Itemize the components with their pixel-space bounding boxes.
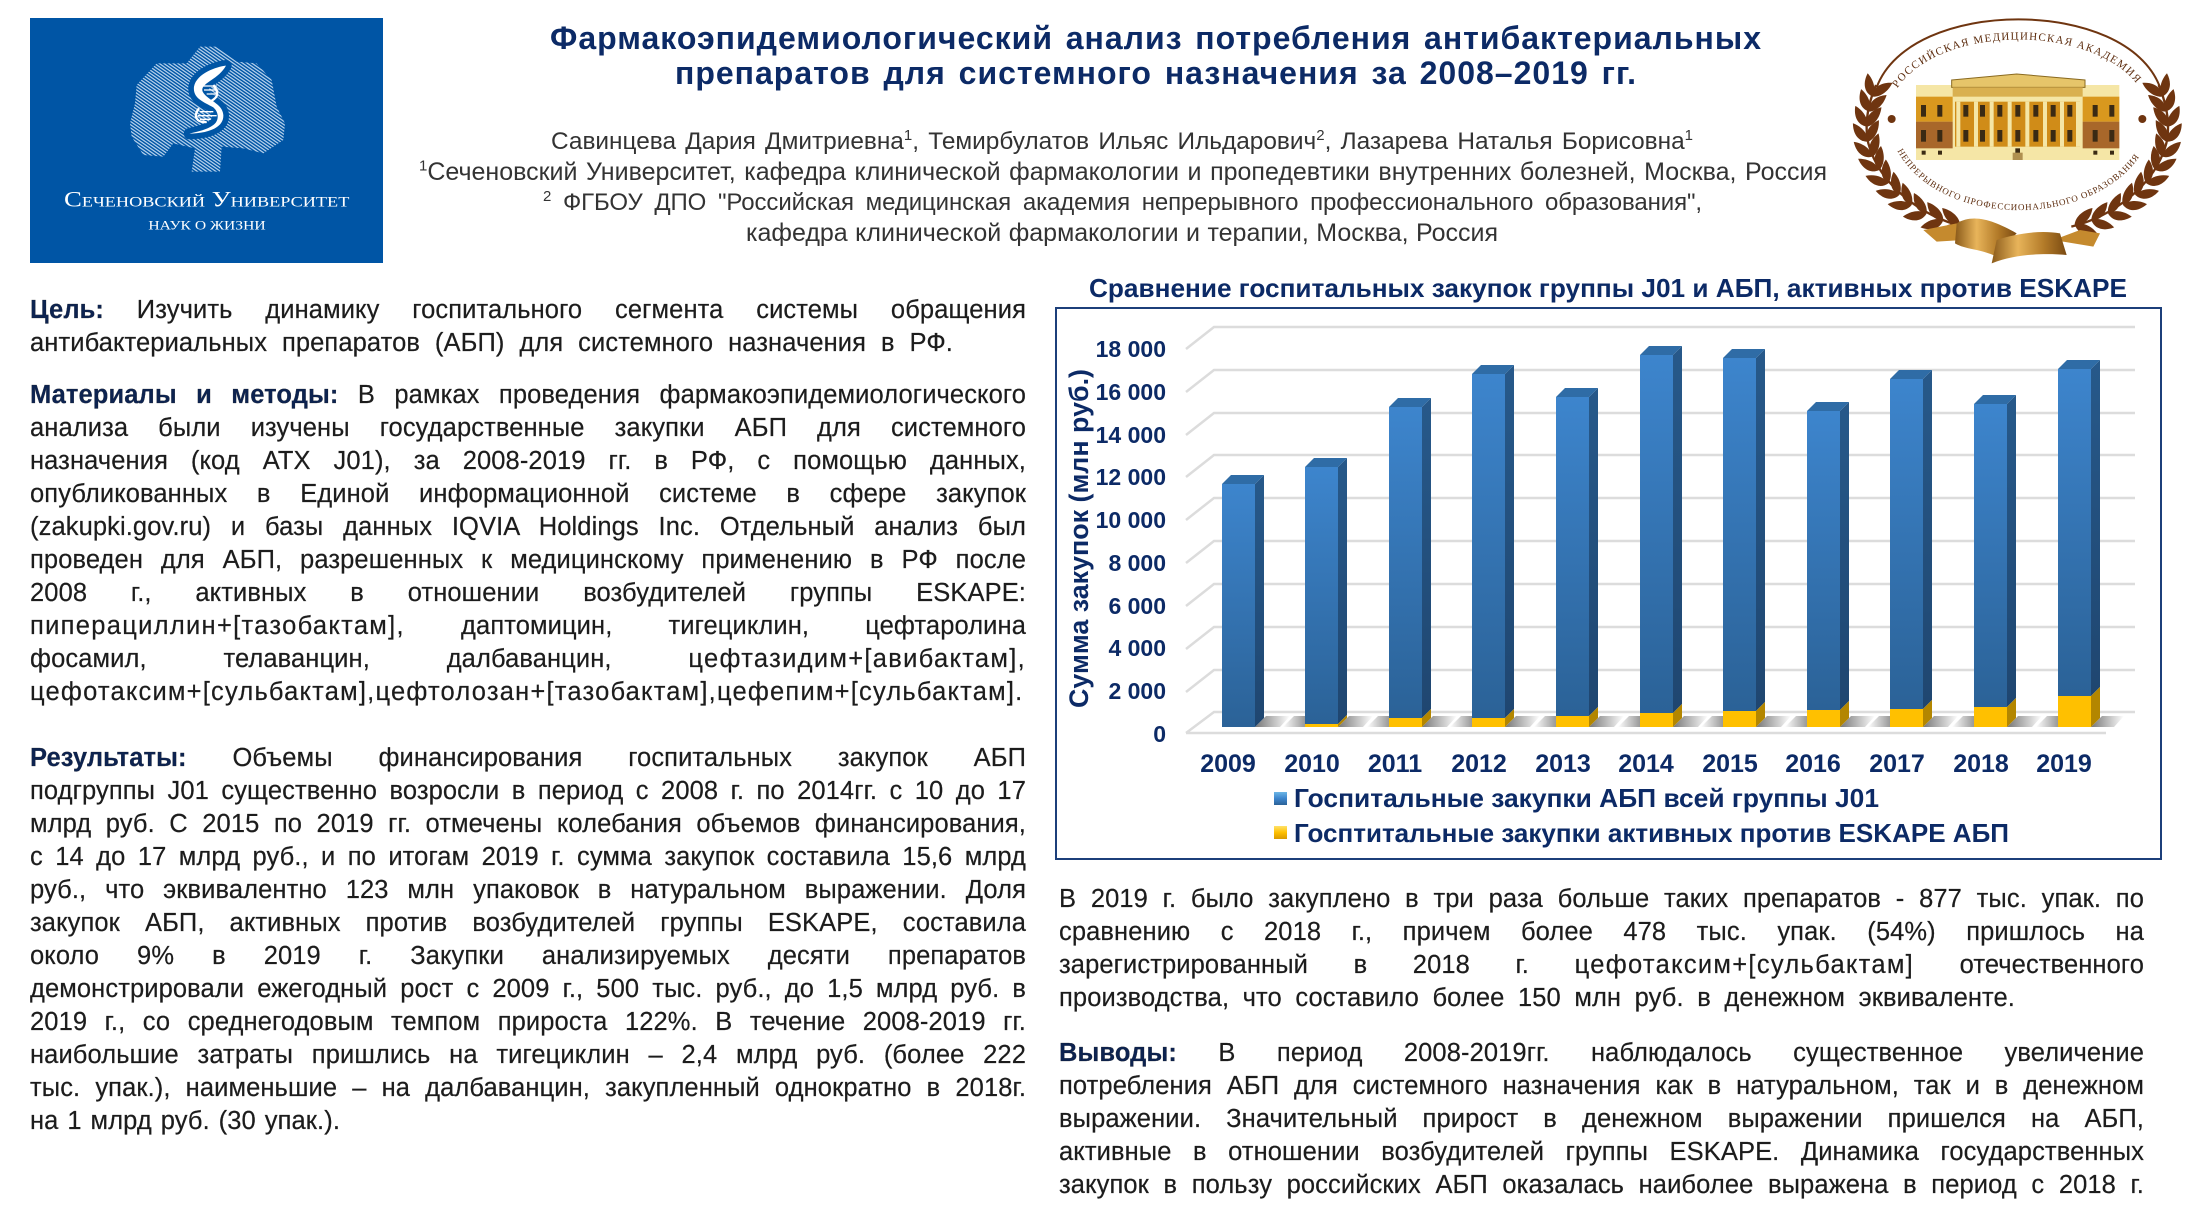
text block: 2019 purchases: производства, что составило более 150 млн руб. в денежном эквиваленте. bbox=[1059, 984, 2015, 1012]
x axis labels: 2013 bbox=[1535, 750, 1591, 778]
floor shadows bbox=[1255, 716, 2124, 727]
bar chart bbox=[1055, 307, 2162, 860]
panel: results: демонстрировали ежегодный рост с 2009 г., 500 тыс. руб., до 1,5 млрд руб. в bbox=[30, 975, 1026, 1003]
panel: materials and methods: пиперациллин+[тазобактам], даптомицин, тигециклин, цефтаролина bbox=[30, 612, 1026, 640]
x axis labels bbox=[1200, 750, 2092, 778]
x axis labels: 2017 bbox=[1869, 750, 1925, 778]
panel: results: Результаты: Объемы финансирования госпитальных закупок АБП bbox=[30, 744, 1026, 772]
y axis labels: 0 bbox=[1153, 721, 1166, 747]
panel: conclusions: активные в отношении возбудителей группы ESKAPE. Динамика государственных bbox=[1059, 1138, 2144, 1166]
x axis labels: 2018 bbox=[1953, 750, 2009, 778]
panel: results: млрд руб. С 2015 по 2019 гг. отмечены колебания объемов финансирования, bbox=[30, 810, 1026, 838]
y axis labels bbox=[1096, 336, 1166, 747]
panel: materials and methods: Материалы и методы: В рамках проведения фармакоэпидемиологического bbox=[30, 381, 1026, 409]
panel: materials and methods: цефотаксим+[сульбактам],цефтолозан+[тазобактам],цефепим+[сульбактам]. bbox=[30, 678, 1023, 706]
panel: materials and methods: анализа были изучены государственные закупки АБП для системного bbox=[30, 414, 1026, 442]
chart heading: Сравнение госпитальных закупок группы J01 и АБП, активных против ESKAPE bbox=[1089, 273, 2127, 303]
panel: results: около 9% в 2019 г. Закупки анализируемых десяти препаратов bbox=[30, 942, 1026, 970]
logo: Russian Medical Academy: НЕПРЕРЫВНОГО ПРОФЕССИОНАЛЬНОГО ОБРАЗОВАНИЯ bbox=[1897, 148, 2139, 210]
logo: Russian Medical Academy: РОССИЙСКАЯ МЕДИЦИНСКАЯ АКАДЕМИЯ bbox=[1892, 32, 2142, 88]
title: Фармакоэпидемиологический анализ потребления антибактериальных bbox=[550, 20, 1762, 56]
logo: Sechenov University bbox=[30, 18, 383, 263]
panel: goal bbox=[30, 296, 1026, 357]
panel: conclusions: Выводы: В период 2008-2019гг. наблюдалось существенное увеличение bbox=[1059, 1039, 2144, 1067]
panel: results: с 14 до 17 млрд руб., и по итогам 2019 г. сумма закупок составила 15,6 млрд bbox=[30, 843, 1026, 871]
grid lines bbox=[1186, 327, 2135, 733]
panel: results: наибольшие затраты пришлись на тигециклин – 2,4 млрд руб. (более 222 bbox=[30, 1041, 1026, 1069]
y axis title: Сумма закупок (млн руб.) bbox=[1064, 369, 1094, 708]
ribbon bbox=[1923, 219, 2100, 263]
panel: results: руб., что эквивалентно 123 млн упаковок в натуральном выражении. Доля bbox=[30, 876, 1026, 904]
x axis labels: 2010 bbox=[1284, 750, 1340, 778]
logo: Sechenov University: НАУК О ЖИЗНИ bbox=[148, 218, 266, 232]
text block: 2019 purchases: сравнению с 2018 г., причем более 478 тыс. упак. (54%) пришлось на bbox=[1059, 918, 2144, 946]
title bbox=[550, 20, 1762, 91]
y axis labels: 12 000 bbox=[1096, 464, 1166, 490]
panel: results bbox=[30, 744, 1026, 1135]
panel: results: 2019 г., со среднегодовым темпом прироста 122%. В течение 2008-2019 гг. bbox=[30, 1008, 1026, 1036]
x axis labels: 2016 bbox=[1785, 750, 1841, 778]
panel: materials and methods bbox=[30, 381, 1026, 706]
authors and affiliations: кафедра клинической фармакологии и терапии, Москва, Россия bbox=[746, 219, 1498, 247]
y axis labels: 8 000 bbox=[1108, 550, 1166, 576]
panel: materials and methods: назначения (код АТХ J01), за 2008-2019 гг. в РФ, с помощью данных, bbox=[30, 447, 1026, 475]
panel: results: подгруппы J01 существенно возросли в период с 2008 г. по 2014гг. с 10 до 17 bbox=[30, 777, 1026, 805]
y axis labels: 4 000 bbox=[1108, 635, 1166, 661]
panel: conclusions: закупок в пользу российских АБП оказалась наиболее выражена в период с 2018 г. bbox=[1059, 1171, 2144, 1199]
y axis labels: 10 000 bbox=[1096, 507, 1166, 533]
legend: Госптитальные закупки активных против ESKAPE АБП bbox=[1294, 818, 2009, 848]
x axis labels: 2012 bbox=[1451, 750, 1507, 778]
authors and affiliations bbox=[419, 127, 1827, 247]
panel: results: тыс. упак.), наименьшие – на далбаванцин, закупленный однократно в 2018г. bbox=[30, 1074, 1026, 1102]
y axis labels: 2 000 bbox=[1108, 678, 1166, 704]
panel: materials and methods: проведен для АБП, разрешенных к медицинскому применению в РФ после bbox=[30, 546, 1026, 574]
panel: materials and methods: опубликованных в Единой информационной системе в сфере закупок bbox=[30, 480, 1026, 508]
panel: conclusions bbox=[1059, 1039, 2144, 1199]
authors and affiliations: Савинцева Дария Дмитриевна1, Темирбулатов Ильяс Ильдарович2, Лазарева Наталья Борисовна1 bbox=[551, 127, 1693, 155]
panel: materials and methods: 2008 г., активных в отношении возбудителей группы ESKAPE: bbox=[30, 579, 1026, 607]
y axis labels: 6 000 bbox=[1108, 593, 1166, 619]
x axis labels: 2014 bbox=[1618, 750, 1674, 778]
panel: results: закупок АБП, активных против возбудителей группы ESKAPE, составила bbox=[30, 909, 1026, 937]
panel: conclusions: потребления АБП для системного назначения как в натуральном, так и в денежном bbox=[1059, 1072, 2144, 1100]
panel: results: на 1 млрд руб. (30 упак.). bbox=[30, 1107, 340, 1135]
panel: materials and methods: (zakupki.gov.ru) и базы данных IQVIA Holdings Inc. Отдельный анализ был bbox=[30, 513, 1026, 541]
authors and affiliations: 2 ФГБОУ ДПО "Российская медицинская академия непрерывного профессионального образования", bbox=[543, 188, 1702, 216]
legend: Госпитальные закупки АБП всей группы J01 bbox=[1294, 783, 1879, 813]
building bbox=[1916, 74, 2119, 160]
title: препаратов для системного назначения за 2008–2019 гг. bbox=[675, 55, 1637, 91]
panel: goal: Цель: Изучить динамику госпитального сегмента системы обращения bbox=[30, 296, 1026, 324]
x axis labels: 2009 bbox=[1200, 750, 1256, 778]
panel: conclusions: выражении. Значительный прирост в денежном выражении пришелся на АБП, bbox=[1059, 1105, 2144, 1133]
y axis labels: 14 000 bbox=[1096, 422, 1166, 448]
logo: Sechenov University: Сеченовский Университет bbox=[64, 187, 349, 212]
logo: Russian Medical Academy bbox=[1852, 18, 2182, 264]
panel: goal: антибактериальных препаратов (АБП) для системного назначения в РФ. bbox=[30, 329, 953, 357]
panel: materials and methods: фосамил, телаванцин, далбаванцин, цефтазидим+[авибактам], bbox=[30, 645, 1026, 673]
x axis labels: 2011 bbox=[1368, 750, 1422, 778]
y axis labels: 18 000 bbox=[1096, 336, 1166, 362]
text block: 2019 purchases: зарегистрированный в 2018 г. цефотаксим+[сульбактам] отечественного bbox=[1059, 951, 2144, 979]
y axis labels: 16 000 bbox=[1096, 379, 1166, 405]
legend bbox=[1274, 783, 2009, 848]
authors and affiliations: 1Сеченовский Университет, кафедра клинической фармакологии и пропедевтики внутренних болезней, Москва, Россия bbox=[419, 158, 1827, 186]
text block: 2019 purchases: В 2019 г. было закуплено в три раза больше таких препаратов - 877 тыс. упак. по bbox=[1059, 885, 2144, 913]
text block: 2019 purchases bbox=[1059, 885, 2144, 1012]
bars bbox=[1222, 346, 2100, 727]
x axis labels: 2015 bbox=[1702, 750, 1758, 778]
x axis labels: 2019 bbox=[2036, 750, 2092, 778]
